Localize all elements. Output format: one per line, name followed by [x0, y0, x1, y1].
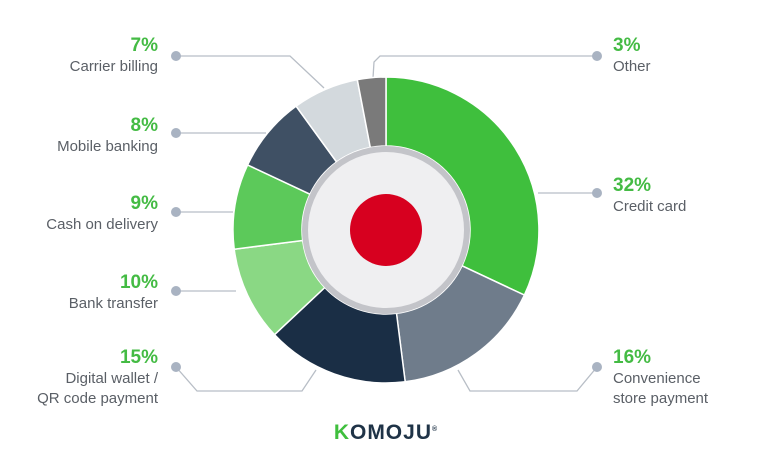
label: cash on delivery: Cash on delivery [46, 216, 158, 233]
label: credit card: Credit card [613, 198, 686, 215]
label: cash on delivery [46, 193, 158, 233]
label: cash on delivery: 9% [131, 193, 158, 214]
label: other: Other [613, 58, 651, 75]
label: digital wallet [37, 347, 158, 407]
dots [171, 51, 602, 372]
center: flag [302, 146, 470, 314]
label: digital wallet: QR code payment [37, 390, 158, 407]
label: bank transfer: Bank transfer [69, 295, 158, 312]
leader lines [176, 56, 597, 391]
logo: KOMOJU® [334, 421, 438, 444]
label: carrier billing: Carrier billing [70, 58, 158, 75]
label: credit card [613, 175, 686, 215]
label: other: 3% [613, 35, 640, 56]
label: carrier billing [70, 35, 158, 75]
label: convenience store [613, 347, 708, 407]
label: other [613, 35, 651, 75]
label: mobile banking: Mobile banking [57, 138, 158, 155]
label: convenience store: store payment [613, 390, 708, 407]
label: mobile banking [57, 115, 158, 155]
label: digital wallet: Digital wallet / [65, 370, 158, 387]
label: bank transfer: 10% [120, 272, 158, 293]
label: bank transfer [69, 272, 158, 312]
label: convenience store: Convenience [613, 370, 701, 387]
label: carrier billing: 7% [131, 35, 158, 56]
label: mobile banking: 8% [131, 115, 158, 136]
label: credit card: 32% [613, 175, 651, 196]
label: digital wallet: 15% [120, 347, 158, 368]
label: convenience store: 16% [613, 347, 651, 368]
segments [233, 77, 539, 383]
